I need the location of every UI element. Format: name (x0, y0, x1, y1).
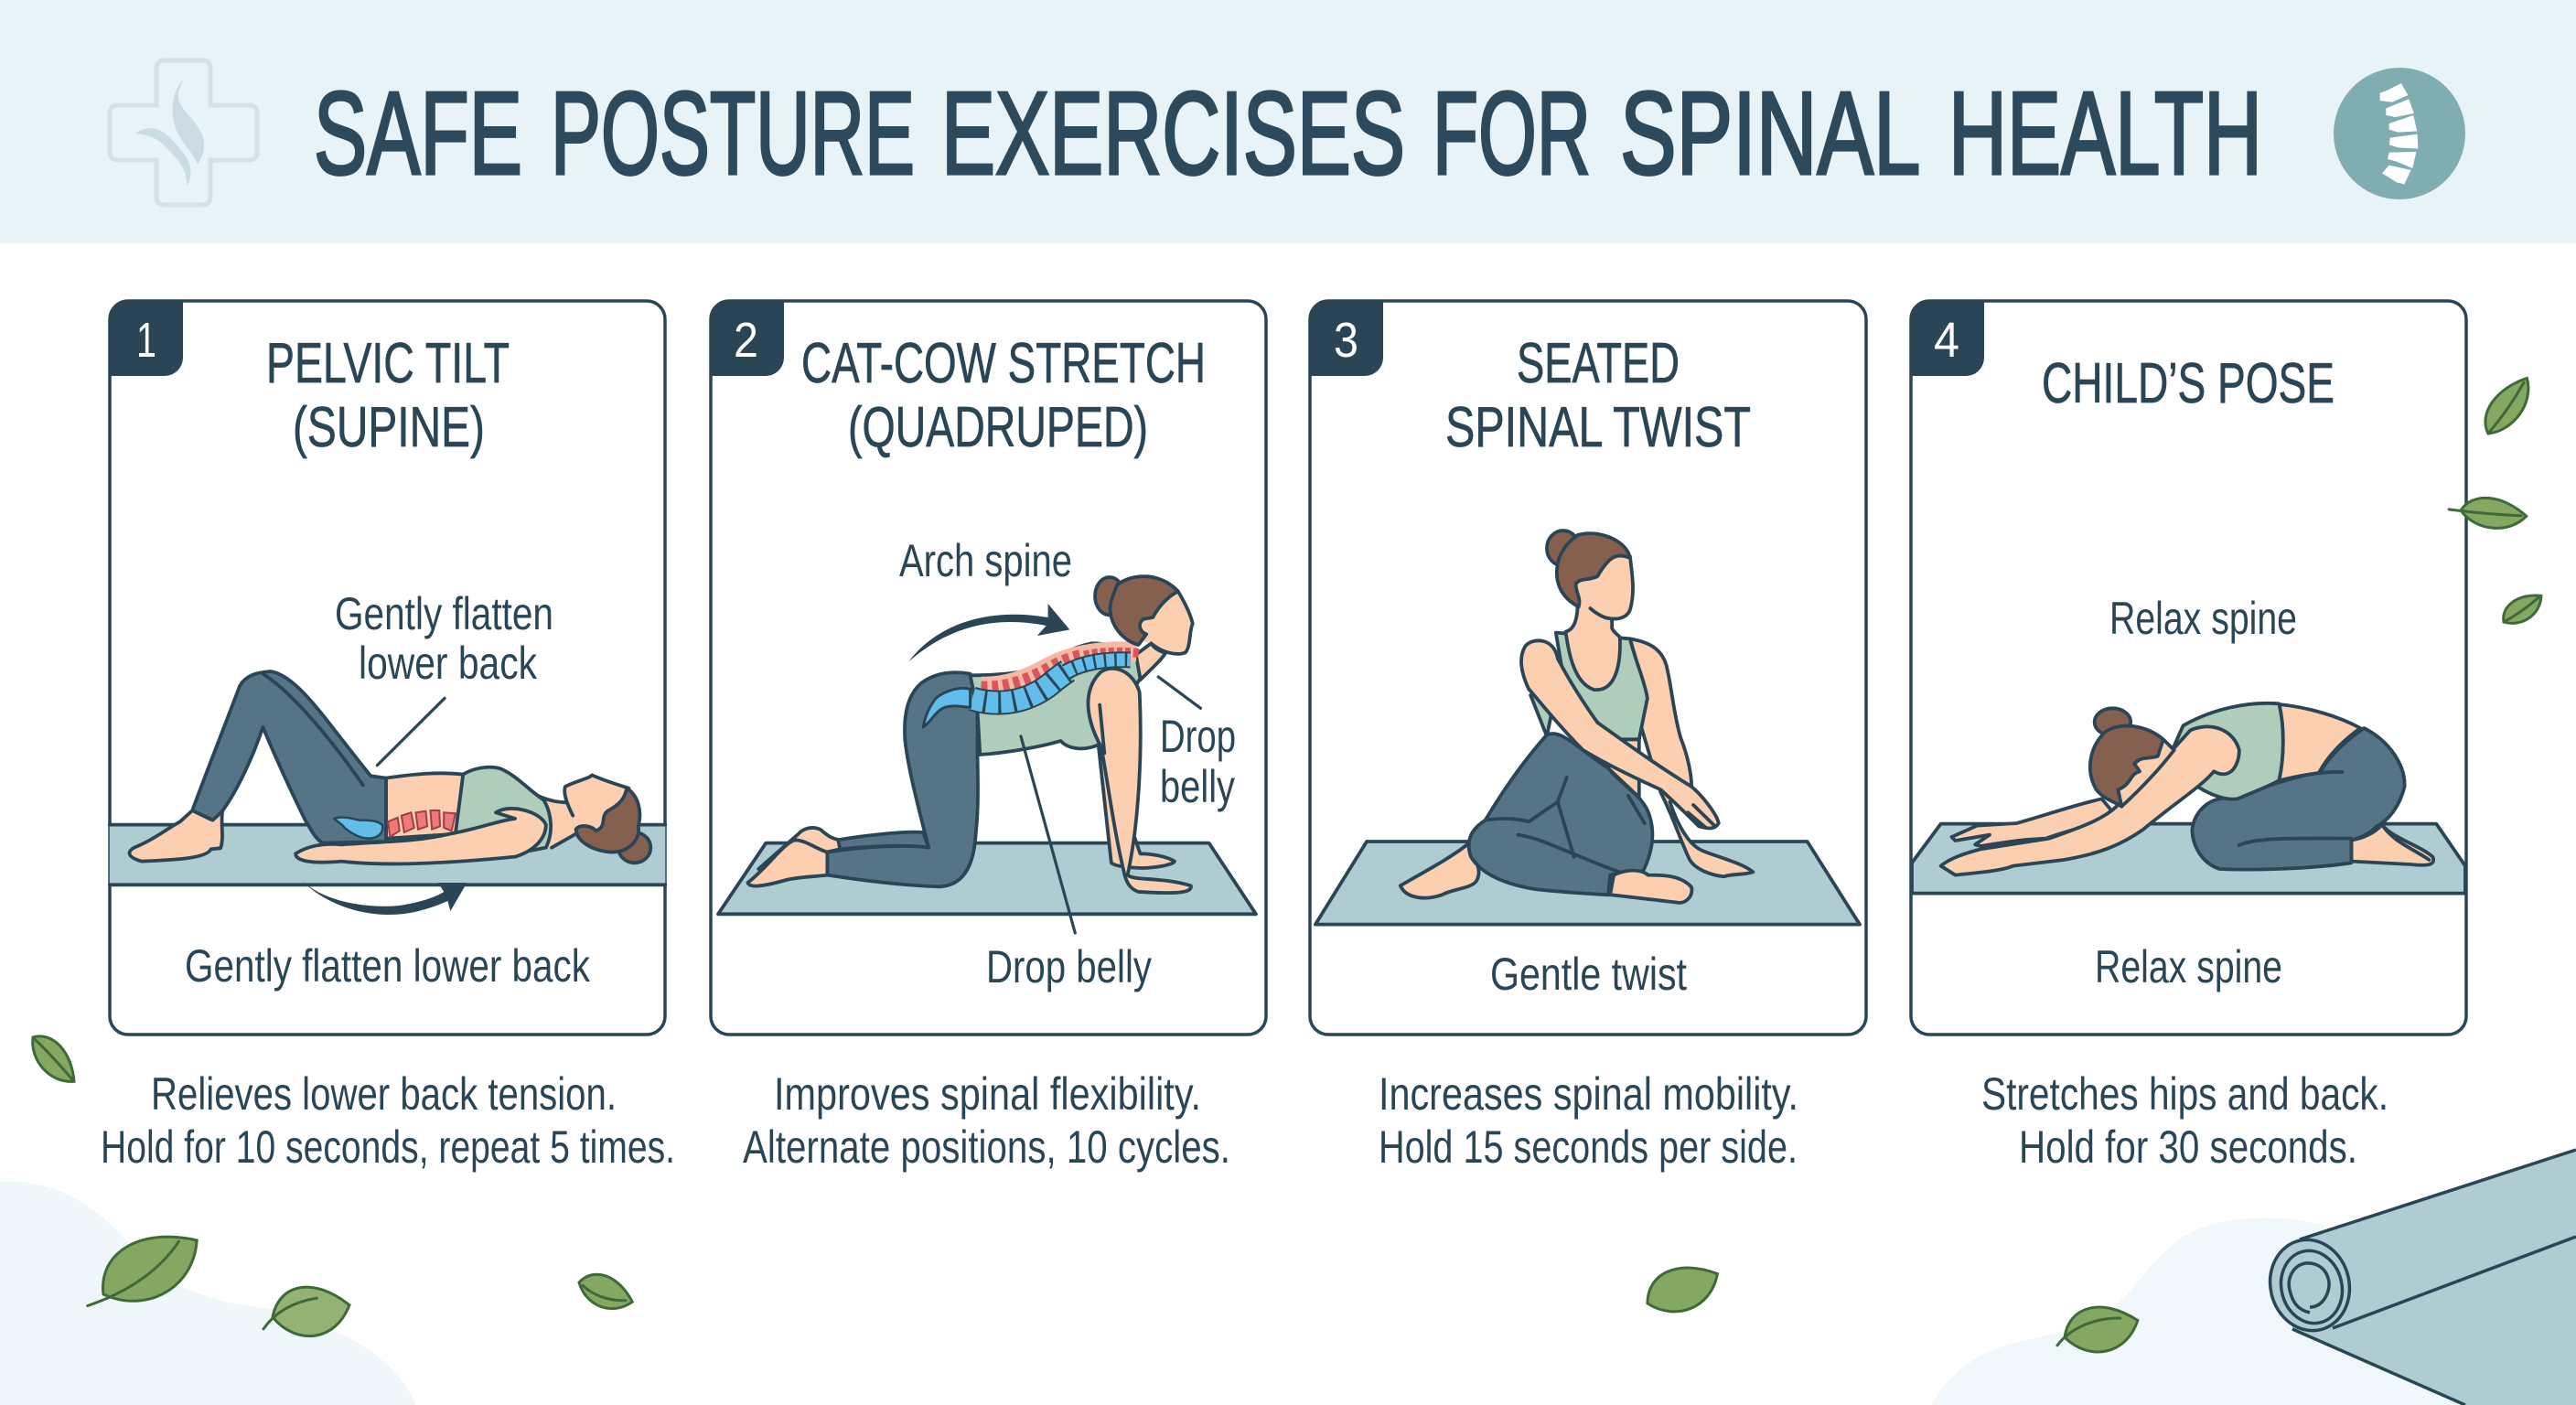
heading: cat-cow stretch: (QUADRUPED) (848, 396, 1148, 459)
label: drop belly caption: Drop belly (986, 941, 1152, 992)
illustration: woman on all fours (718, 576, 1256, 933)
leaf: right margin top (2476, 370, 2539, 442)
title: SAFE (314, 68, 522, 199)
spine: vertebrae (923, 651, 1140, 727)
heading: cat-cow stretch (801, 332, 1206, 459)
icon: rolled yoga mat (2260, 1150, 2576, 1405)
illustration: woman in child's pose (1912, 703, 2465, 894)
illustration: woman seated twisting (1315, 531, 1860, 925)
callout line: drop belly bottom (1021, 736, 1075, 933)
heading: pelvic tilt: (SUPINE) (293, 396, 485, 459)
description 4: Hold for 30 seconds. (2019, 1121, 2357, 1173)
arrow: arch spine (908, 604, 1069, 661)
heading: pelvic tilt: PELVIC TILT (266, 332, 510, 395)
label: relax spine upper: Relax spine (2109, 593, 2297, 644)
label: drop belly side (1160, 711, 1236, 812)
label: drop belly side: belly (1160, 761, 1235, 812)
heading: child's pose: CHILD’S POSE (2042, 352, 2334, 415)
description 4 (1981, 1068, 2388, 1173)
heading: seated spinal twist: SEATED (1517, 332, 1680, 395)
title: POSTURE (551, 68, 915, 199)
label: gently flatten lower back callout: Gently flatten (335, 588, 553, 639)
header band (0, 0, 2576, 243)
icon: spine badge (2334, 68, 2465, 199)
panel 2: cat-cow stretch (711, 301, 1266, 1035)
description 3 (1379, 1068, 1798, 1173)
leaf: bottom left small (258, 1281, 353, 1344)
leaf: bottom centre left (574, 1268, 638, 1316)
number badge 4: 4 (1934, 313, 1959, 368)
title: SPINAL (1620, 68, 1918, 199)
leaf: bottom right (2051, 1298, 2142, 1361)
arrow: pelvic rotation (300, 879, 467, 915)
leaf: left margin (23, 1028, 84, 1091)
icon: medical cross logo (110, 60, 257, 205)
heading: pelvic tilt (266, 332, 510, 459)
label: gently flatten lower back callout: lower back (359, 638, 538, 689)
background blob: bottom right (1930, 1217, 2470, 1405)
label: gently flatten lower back caption: Gently flatten lower back (185, 940, 591, 992)
number badge 2 (711, 301, 784, 376)
label: gentle twist: Gentle twist (1490, 949, 1687, 1000)
panel 1: pelvic tilt (110, 301, 665, 1035)
background blob: bottom left (0, 1182, 416, 1405)
number badge 3: 3 (1334, 313, 1358, 368)
leaf: bottom centre right (1639, 1254, 1726, 1324)
callout line: drop belly side (1158, 677, 1200, 708)
description 1: Relieves lower back tension. (151, 1068, 617, 1120)
number badge 4 (1911, 301, 1984, 376)
heading: cat-cow stretch: CAT-COW STRETCH (801, 332, 1206, 395)
title: HEALTH (1948, 68, 2262, 199)
description 3: Hold 15 seconds per side. (1379, 1121, 1798, 1173)
label: gently flatten lower back callout (335, 588, 553, 689)
far arm (1099, 747, 1175, 868)
description 1: Hold for 10 seconds, repeat 5 times. (101, 1121, 675, 1173)
title: EXERCISES (941, 68, 1405, 199)
leaf: right margin middle (2448, 495, 2528, 531)
number badge 3 (1310, 301, 1383, 376)
number badge 2: 2 (734, 313, 758, 368)
panel 3: seated spinal twist (1310, 301, 1866, 1035)
description 2: Alternate positions, 10 cycles. (743, 1121, 1230, 1173)
heading: seated spinal twist (1445, 332, 1751, 459)
panel 4: child's pose (1911, 301, 2466, 1035)
label: relax spine caption: Relax spine (2095, 941, 2282, 992)
description 2 (743, 1068, 1230, 1173)
description 1 (101, 1068, 675, 1173)
leaf: right margin lower (2497, 586, 2548, 631)
callout line: lower back (377, 698, 445, 766)
heading: seated spinal twist: SPINAL TWIST (1445, 396, 1751, 459)
label: drop belly side: Drop (1160, 711, 1236, 762)
leaf: bottom left large (72, 1215, 211, 1329)
face and neck fill (515, 775, 628, 848)
number badge 1: 1 (136, 313, 156, 368)
description 4: Stretches hips and back. (1981, 1068, 2388, 1120)
description 3: Increases spinal mobility. (1379, 1068, 1798, 1120)
label: arch spine: Arch spine (899, 535, 1072, 586)
illustration: woman lying on mat with knees bent (110, 671, 665, 915)
description 2: Improves spinal flexibility. (774, 1068, 1201, 1120)
near arm (1089, 669, 1191, 893)
title: FOR (1433, 68, 1591, 199)
number badge 1 (110, 301, 183, 376)
